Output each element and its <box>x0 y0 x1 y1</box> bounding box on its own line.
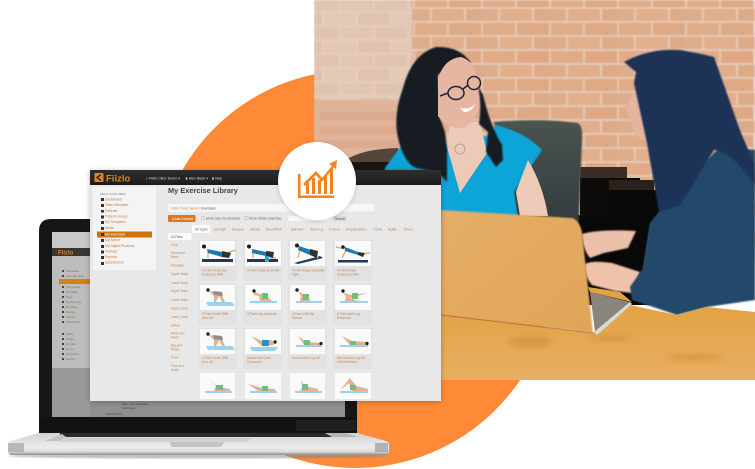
exercise card row 3: 4 Point Kneel With <box>202 356 228 360</box>
body part filter list: Upper Body <box>171 272 188 276</box>
fiizlo logo: Fiizlo <box>106 174 130 184</box>
body part filter list: Lower Body <box>171 281 188 285</box>
exercise card row 1 <box>198 240 372 281</box>
filter controls: Show hidden exercises <box>249 216 282 220</box>
exercise type tabs: Cardio <box>373 228 383 232</box>
neck and chest <box>447 122 487 193</box>
sidebar menu: My Digital Products <box>105 244 135 248</box>
exercise type tabs: Warm Up <box>310 228 324 232</box>
sidebar menu: My Templates <box>105 220 126 224</box>
software window: exercise library <box>90 170 441 401</box>
laptop screen: Templates <box>66 290 79 294</box>
sidebar menu: Dashboard <box>105 198 122 202</box>
exercise card row 1: 4 Point Kneel Shoulder <box>292 268 326 272</box>
white circle <box>278 142 356 220</box>
woman 1 <box>380 47 548 225</box>
exercise type tabs: Agility <box>388 228 397 232</box>
sidebar menu: News <box>105 226 114 230</box>
exercise type tabs: Proprioception <box>346 228 367 232</box>
exercise card row 1: 4 Point Kneel on Roller <box>247 268 281 272</box>
hair <box>396 47 471 182</box>
inner shirt <box>643 205 680 275</box>
sidebar menu <box>93 187 156 270</box>
page title: My Exercise Library <box>168 186 239 195</box>
orange background circle <box>156 70 554 468</box>
exercise type tabs: Release <box>232 228 244 232</box>
top navigation bar: ⌂ Fiizlo Clinic Demo ▾ <box>146 176 180 180</box>
body part filter list: Shoulder <box>171 264 185 268</box>
laptop screen: Fiizlo <box>58 250 74 256</box>
face <box>626 92 650 143</box>
filter controls: Search <box>335 217 345 221</box>
laptop in photo <box>441 210 632 335</box>
top navigation bar: ♟ Alex Black ▾ <box>185 176 208 180</box>
exercise card row 3 <box>198 328 372 369</box>
laptop base <box>8 433 389 455</box>
top navigation bar: ▮ Help <box>212 176 222 180</box>
laptop screen: Videos <box>66 337 75 341</box>
exercise card row 3: Arm Lift <box>202 360 213 364</box>
active menu item <box>97 232 152 238</box>
laptop screen <box>52 232 345 417</box>
exercise card row 2: 4 Point with Hip <box>292 312 314 316</box>
woman 2 <box>582 50 755 315</box>
exercise card row 1: 4 Point Kneel Hip <box>202 268 227 272</box>
exercise card row 1: Superman With <box>337 272 359 276</box>
photo: two women talking at a laptop <box>314 0 755 380</box>
laptop screen: Team Members <box>66 274 85 278</box>
top navigation bar <box>90 170 441 185</box>
body part filter list <box>168 233 192 372</box>
exercise card row 1: Flgm <box>292 272 299 276</box>
laptop screen: Sample Text <box>106 412 123 416</box>
exercise type tabs <box>192 225 413 233</box>
body part filter list: Ankle <box>171 368 179 372</box>
filter controls: Show only my exercises <box>206 216 241 220</box>
filter controls <box>168 215 347 222</box>
body part filter list: Core <box>171 243 178 247</box>
laptop screen: Exercises <box>122 406 136 410</box>
hair <box>624 50 755 212</box>
leather chair <box>494 120 582 235</box>
top hand <box>582 230 636 258</box>
dark furniture <box>346 148 669 305</box>
laptop screen: Account <box>66 357 76 361</box>
sidebar menu: Team Members <box>105 203 129 207</box>
sidebar menu: FIIZLO CLINIC DEMO <box>100 192 126 196</box>
right hair lock <box>478 86 503 167</box>
exercise card row 3: Abs Double Leg Lift <box>292 356 320 360</box>
jacket <box>630 147 755 315</box>
brick wall <box>314 0 755 260</box>
body part filter list: Foot and <box>171 364 184 368</box>
exercise type tabs: Neuro/Mob <box>266 228 282 232</box>
laptop screen: Dashboard <box>66 269 79 273</box>
exercise card row 3: Abdominal Cycle <box>247 356 271 360</box>
fiizlo logo <box>94 173 130 184</box>
laptop screen: Subscription <box>66 320 81 324</box>
exercise card row 2: 4 Point with Leg <box>337 312 360 316</box>
sidebar menu: Reports <box>105 255 117 259</box>
laptop screen: Reports <box>66 315 76 319</box>
laptop bezel <box>39 219 357 434</box>
table <box>441 305 755 380</box>
exercise card row 2: 4 Point Leg Abductor <box>247 312 278 316</box>
exercise card row 2: Arm Lift <box>202 316 213 320</box>
exercise card row 1: Extension With <box>202 272 223 276</box>
exercise card row 2: Extension <box>337 316 351 320</box>
exercise card row 2: Flexion <box>292 316 303 320</box>
sidebar menu: My Advice <box>105 238 121 242</box>
exercise card row 2: 4 Point Kneel With <box>202 312 228 316</box>
body part filter list: Head and <box>171 251 185 255</box>
sidebar menu: Patients <box>105 209 118 213</box>
necklace <box>455 144 465 154</box>
laptop screen: Resources <box>66 352 79 356</box>
breadcrumb: Fiizlo Clinic Demo / Exercises <box>171 206 216 210</box>
exercise type tabs: All Types <box>195 228 208 232</box>
exercise type tabs: Strength <box>214 228 226 232</box>
body part filter list: Pelvis <box>171 348 180 352</box>
body part filter list: All Parts <box>171 235 183 239</box>
exercise type tabs: Ball Mob <box>291 228 304 232</box>
laptop screen: Library <box>66 332 75 336</box>
body part filter list: Neck <box>171 255 179 259</box>
orange chart icon <box>298 160 337 198</box>
exercise type tabs: Others <box>403 228 413 232</box>
exercise type tabs: Stretch <box>250 228 260 232</box>
blue top <box>380 125 542 225</box>
body part filter list: Upper Limb <box>171 306 188 310</box>
macbook laptop <box>8 219 389 458</box>
laptop shadow <box>8 454 388 458</box>
body part filter list: Lower Limb <box>171 315 188 319</box>
laptop screen: My Exercises <box>66 300 82 304</box>
exercise card row 2 <box>198 284 372 325</box>
icon badge: growth chart <box>278 142 356 220</box>
body part filter list: Upper Back <box>171 289 188 293</box>
sidebar menu: Settings <box>105 250 118 254</box>
laptop hinge <box>40 417 357 432</box>
exercise card row 3: with Extension <box>337 360 358 364</box>
sidebar menu: Patient Groups <box>105 214 128 218</box>
body part filter list: Lower Back <box>171 298 188 302</box>
laptop screen: Side: Left and Right <box>122 402 149 406</box>
laptop screen: Settings <box>66 310 76 314</box>
breadcrumb <box>168 204 374 212</box>
window background <box>90 170 441 401</box>
smile <box>460 104 475 112</box>
exercise card row 3: Crossover <box>247 360 262 364</box>
body part filter list: Elbow <box>171 324 180 328</box>
exercise card row 4 <box>200 373 371 399</box>
arm <box>516 160 548 216</box>
laptop screen: Forum <box>66 347 74 351</box>
exercise card row 3: Abs Double Leg Lift <box>337 356 365 360</box>
face <box>438 57 481 128</box>
sidebar menu: Subscription <box>105 260 124 264</box>
body part filter list: Wrist and <box>171 332 185 336</box>
sidebar menu: My Exercises <box>105 232 125 236</box>
laptop screen: My Files <box>66 342 76 346</box>
laptop screen: My Advice <box>66 305 78 309</box>
table wood grain <box>508 336 723 361</box>
body part filter list: Hand <box>171 336 179 340</box>
exercise card row 1: 4 Point Kneel <box>337 268 356 272</box>
body part filter list: Knee <box>171 356 179 360</box>
filter controls: ● Add Exercise <box>172 217 194 221</box>
exercise type tabs: Posture <box>329 228 340 232</box>
body part filter list: Hip and <box>171 344 182 348</box>
laptop screen: News <box>66 295 73 299</box>
lower hand <box>585 262 640 293</box>
glasses <box>440 76 480 100</box>
laptop screen: Client Goals <box>66 285 81 289</box>
